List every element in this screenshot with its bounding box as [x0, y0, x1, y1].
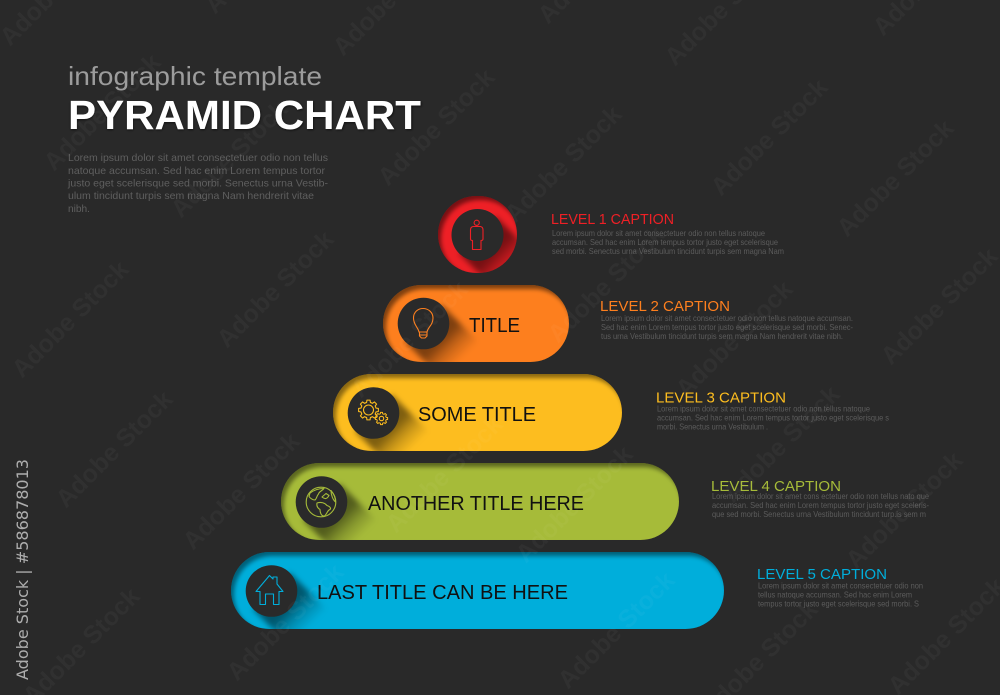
caption: level 4: accumsan. Sed hac enim Lorem tempus tortor justo eget sceleris- [712, 501, 929, 510]
panel: level 3 pill [333, 374, 622, 451]
caption: level 3: morbi. Senectus urna Vestibulum . [657, 422, 768, 432]
stock watermarks: Adobe Stock [345, 275, 473, 403]
caption: level 1: accumsan. Sed hac enim Lorem tempus tortor justo eget scelerisque [552, 238, 778, 247]
stock watermarks: Adobe Stock [840, 446, 968, 574]
intro text block: justo eget scelerisque sed morbi. Senectus urna Vestib- [67, 178, 328, 190]
stock watermarks: Adobe Stock [705, 73, 833, 201]
caption: level 1: Lorem ipsum dolor sit amet consectetuer odio non tellus natoque [552, 229, 765, 238]
stock watermarks: Adobe Stock [499, 100, 627, 228]
caption: level 2 [600, 299, 853, 341]
stock watermarks: Adobe Stock [510, 440, 638, 568]
intro text block: Lorem ipsum dolor sit amet consectetuer odio non tellus [68, 153, 328, 164]
stock watermarks: Adobe Stock [372, 63, 500, 191]
stock watermarks: Adobe Stock [177, 427, 305, 555]
label: another title here: ANOTHER TITLE HERE [368, 493, 584, 515]
stock watermarks: Adobe Stock [380, 410, 508, 538]
caption: level 2: Sed hac enim Lorem tempus tortor justo eget scelerisque sed morbi. Senec- [601, 323, 853, 332]
caption: level 4: Lorem ipsum dolor sit amet cons ectetuer odio non tellus nato que [712, 492, 929, 501]
icon: globe [306, 487, 336, 517]
caption: level 4: que sed morbi. Senectus urna Vestibulum tincidunt turp.is sem m [712, 510, 926, 519]
caption: level 4 [711, 479, 929, 519]
stock watermarks: Adobe Stock [542, 220, 670, 348]
caption: level 4: LEVEL 4 CAPTION [711, 479, 841, 495]
icon: house [256, 576, 283, 604]
stock watermarks: Adobe Stock [875, 242, 1000, 370]
caption: level 2: Lorem ipsum dolor sit amet consectetuer odio non tellus natoque accumsan. [601, 314, 853, 323]
stock watermarks: Adobe Stock [38, 48, 166, 176]
icon: person [470, 220, 483, 250]
stock watermarks: Adobe Stock [552, 566, 680, 694]
panel: level 1 circle [438, 196, 517, 273]
stock id vertical label: Adobe Stock | #586878013 [13, 459, 32, 680]
intro text block: ulum tincidunt turpis sem magna Nam hendrerit vitae [68, 191, 314, 202]
panel: level 5 pill [231, 552, 724, 629]
label: title: TITLE [469, 315, 520, 337]
caption: level 3: LEVEL 3 CAPTION [656, 390, 786, 406]
icon: gears [359, 400, 388, 425]
caption: level 3: accumsan. Sed hac enim Lorem tempus tortor justo eget scelerisque s [657, 414, 889, 422]
caption: level 3: Lorem ipsum dolor sit amet consectetuer odio non tellus natoque [657, 404, 870, 414]
heading: subtitle: infographic template [68, 61, 322, 91]
caption: level 1 [551, 212, 784, 256]
panel: level 2 pill [383, 285, 569, 362]
caption: level 5: LEVEL 5 CAPTION [757, 567, 887, 583]
caption: level 3 [656, 390, 889, 432]
icon: light bulb [414, 308, 433, 338]
stock watermarks: Adobe Stock [50, 385, 178, 513]
caption: level 1: sed morbi. Senectus urna Vestibulum tincidunt turpis sem magna Nam [552, 247, 784, 256]
caption: level 1: LEVEL 1 CAPTION [551, 212, 674, 228]
caption: level 2: tus urna Vestibulum tincidunt turpis sem magna Nam hendrerit vitae nibh. [601, 332, 843, 341]
intro text block [67, 153, 328, 215]
caption: level 5 [757, 567, 923, 608]
heading: title: PYRAMID CHART [68, 92, 421, 138]
stock watermarks: Adobe Stock [670, 275, 798, 403]
caption: level 5: tellus natoque accumsan. Sed hac enim Lorem [758, 590, 912, 600]
stock watermarks: Adobe Stock [221, 558, 349, 686]
caption: level 5: Lorem ipsum dolor sit amet consectetuer odio non [758, 582, 923, 590]
intro text block: nibh. [68, 204, 90, 215]
label: last title: LAST TITLE CAN BE HERE [317, 582, 568, 604]
caption: level 5: tempus tortor justo eget scelerisque sed morbi. S [758, 600, 919, 608]
stock watermarks: Adobe Stock [165, 95, 293, 223]
heading: title: PYRAMID CHART [68, 93, 422, 139]
stock watermarks: Adobe Stock [717, 380, 845, 508]
label: some title: SOME TITLE [418, 404, 536, 426]
intro text block: natoque accumsan. Sed hac enim Lorem tempus tortor [68, 166, 326, 177]
stock watermarks: Adobe Stock [831, 114, 959, 242]
stock watermarks: Adobe Stock [6, 255, 134, 383]
panel: level 4 pill [281, 463, 679, 540]
stock watermarks: Adobe Stock [211, 225, 339, 353]
caption: level 2: LEVEL 2 CAPTION [600, 299, 730, 315]
